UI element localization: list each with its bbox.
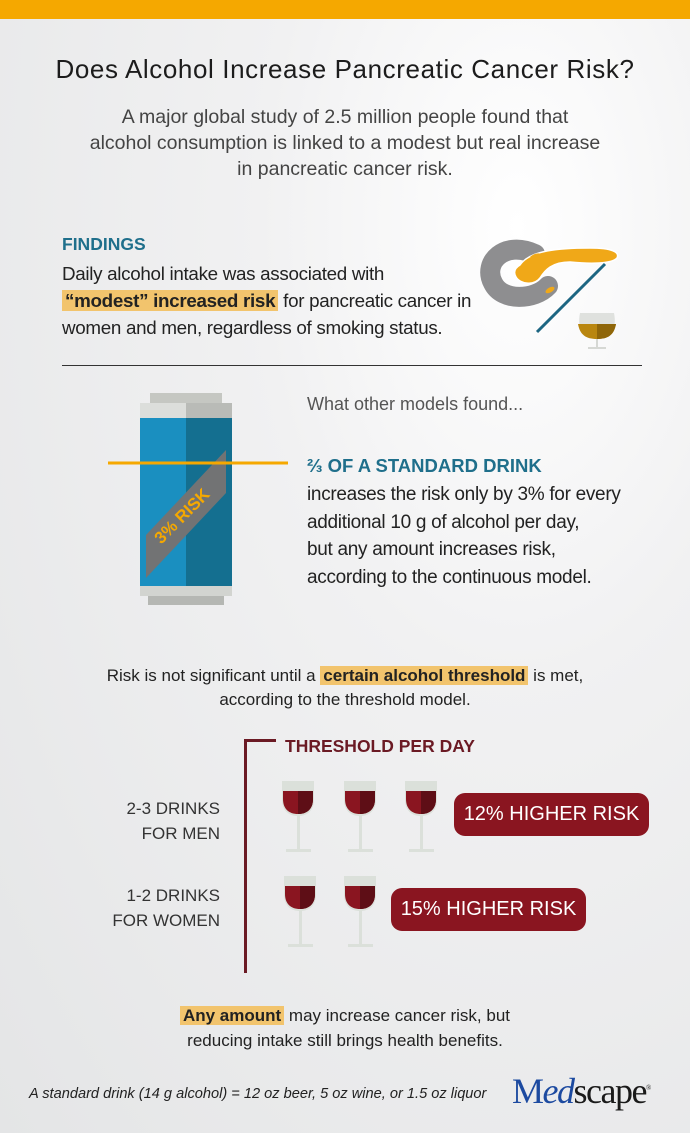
closing text: Any amount may increase cancer risk, but — [183, 1006, 510, 1025]
pill: 12% — [454, 793, 649, 836]
continuous model text: increases the risk only by 3% for every — [307, 484, 621, 505]
subtitle — [90, 106, 600, 180]
footnote: A standard drink (14 g alcohol) = 12 oz beer, 5 oz wine, or 1.5 oz liquor — [29, 1086, 486, 1102]
heading: two-thirds: ⅔ OF A STANDARD DRINK — [307, 455, 542, 476]
men label: FOR MEN — [142, 824, 220, 843]
continuous model text — [307, 484, 621, 588]
icon: can — [108, 393, 288, 605]
pill: 15% — [391, 888, 586, 931]
other models intro: What other models found... — [307, 394, 523, 414]
icon: pancreas and glass — [480, 240, 617, 349]
threshold heading: THRESHOLD PER DAY — [285, 736, 475, 756]
subtitle: in pancreatic cancer risk. — [237, 158, 453, 180]
threshold sentence: according to the threshold model. — [219, 690, 471, 709]
continuous model text: according to the continuous model. — [307, 566, 592, 588]
closing text — [180, 1006, 510, 1050]
threshold sentence: Risk is not significant until a certain alcohol threshold is met, — [107, 666, 583, 685]
findings text: “modest” increased risk for pancreatic cancer in — [65, 290, 471, 311]
pill: 12%: 12% HIGHER RISK — [464, 803, 639, 825]
findings text — [62, 263, 471, 338]
divider — [62, 365, 642, 366]
findings text: Daily alcohol intake was associated with — [62, 263, 384, 284]
men label: 2-3 DRINKS — [126, 799, 220, 818]
findings heading: FINDINGS — [62, 234, 146, 254]
continuous model text: additional 10 g of alcohol per day, — [307, 512, 579, 532]
subtitle: A major global study of 2.5 million people found that — [122, 106, 568, 128]
men label — [126, 799, 220, 843]
logo: Medscape® — [512, 1071, 650, 1111]
continuous model text: but any amount increases risk, — [307, 539, 556, 560]
women label — [112, 886, 220, 930]
icon: can: 3% RISK — [151, 484, 214, 548]
women label: 1-2 DRINKS — [126, 886, 220, 905]
bracket — [244, 739, 276, 973]
findings text: women and men, regardless of smoking status. — [62, 317, 442, 338]
threshold sentence — [107, 666, 583, 709]
women label: FOR WOMEN — [112, 911, 220, 930]
top bar — [0, 0, 690, 19]
closing text: reducing intake still brings health benefits. — [187, 1031, 503, 1050]
subtitle: alcohol consumption is linked to a modest but real increase — [90, 132, 600, 154]
wine glasses — [282, 781, 437, 947]
title: Does Alcohol Increase Pancreatic Cancer Risk? — [55, 54, 635, 84]
pill: 15%: 15% HIGHER RISK — [401, 898, 576, 920]
